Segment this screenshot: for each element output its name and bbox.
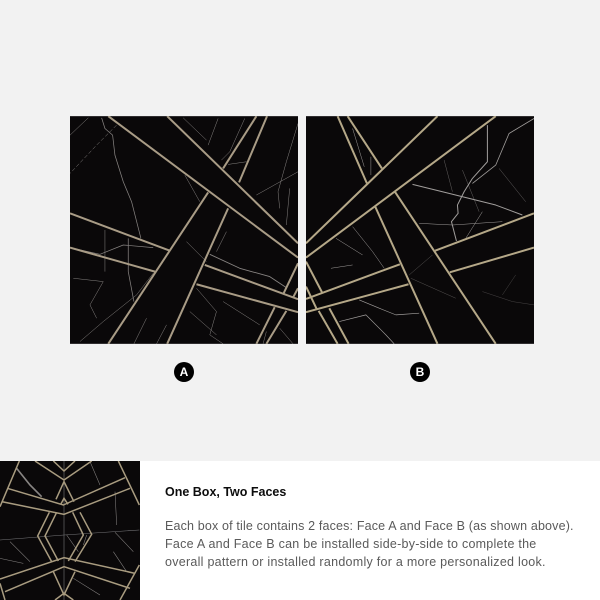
tile face B bbox=[306, 116, 534, 344]
long diagonals bbox=[108, 116, 298, 258]
body text: overall pattern or installed randomly for a more personalized look. bbox=[165, 555, 546, 569]
body text: Each box of tile contains 2 faces: Face A and Face B (as shown above). bbox=[165, 519, 574, 533]
badge B bbox=[410, 362, 430, 382]
body text: Face A and Face B can be installed side-by-side to complete the bbox=[165, 537, 537, 551]
tile face A bbox=[70, 116, 298, 344]
badge A bbox=[174, 362, 194, 382]
panel: description bbox=[0, 461, 600, 600]
body text bbox=[165, 519, 574, 569]
installed pattern photo bbox=[0, 461, 140, 600]
badge A: A bbox=[180, 365, 188, 379]
heading: One Box, Two Faces bbox=[165, 485, 286, 499]
badge B: B bbox=[416, 365, 424, 379]
